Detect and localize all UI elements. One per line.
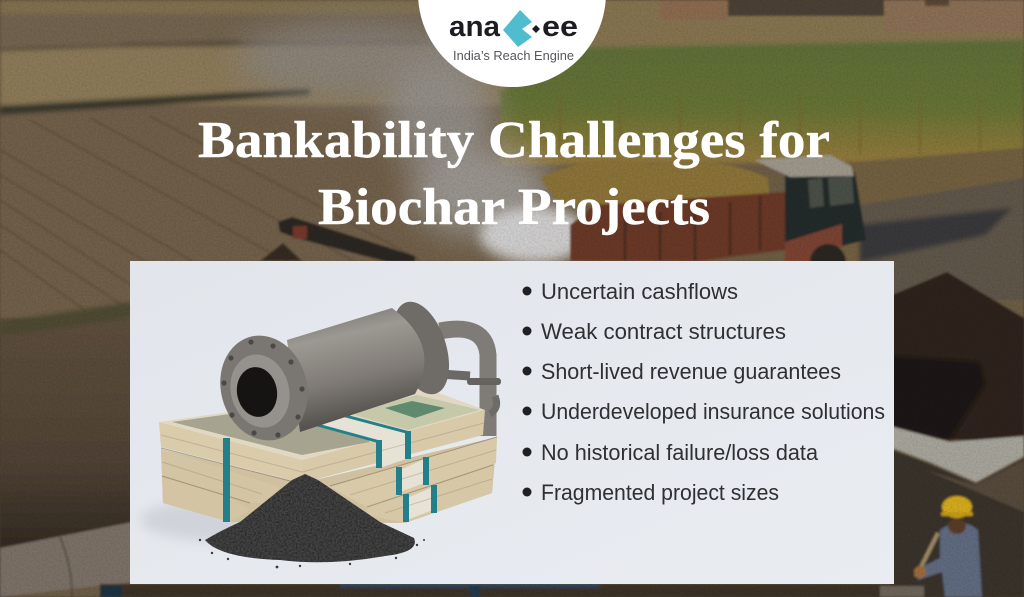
sugarcane field [500,40,1024,165]
bottom-left pipe [0,522,132,597]
logo tagline: India’s Reach Engine [453,49,574,63]
logo badge [418,0,606,87]
ground, lower right [890,449,1024,597]
smoke [235,22,590,263]
right bill [347,395,480,430]
truck [540,155,866,280]
paper band on top [312,414,409,468]
far field and buildings, right [540,0,1024,52]
biochar heap [199,474,425,568]
logo wordmark right: ee [542,11,578,43]
bullet: uncertain cashflows: Uncertain cashflows [541,279,738,304]
logo dot [532,25,540,33]
top layer [159,422,302,483]
wheel [810,244,846,280]
bullet: short-lived revenue guarantees: Short-lived revenue guarantees [541,359,841,384]
bullet: fragmented project sizes: Fragmented project sizes [541,480,779,505]
road, left [0,318,132,558]
layer separators [161,423,497,513]
pipe opening [233,364,281,420]
road, right [830,148,1024,300]
worker [914,496,982,597]
left bill [172,400,370,455]
front flange [209,326,319,450]
panel: challenges card [130,261,894,584]
biochar pile [880,272,1024,440]
flange bolts [221,339,305,438]
illustration: pipe on cash stacks with biochar [140,295,501,568]
title: Bankability Challenges for [198,112,830,169]
truck bed [570,192,785,261]
middle layer [161,449,280,503]
cab [785,172,866,262]
logo diamond mark [503,10,532,47]
title: Biochar Projects [318,179,710,236]
bottom rails [100,584,900,597]
pipe body [287,308,424,432]
far fields, left [0,0,560,325]
title [198,112,830,236]
shadow [140,498,320,542]
bullet: weak contract structures: Weak contract structures [541,319,786,344]
stack base [161,437,497,523]
bottom layer [162,477,250,522]
tarp [890,426,1024,482]
cash stack [159,385,497,523]
bullet: no historical failure/loss data: No historical failure/loss data [541,440,819,465]
logo wordmark left: ana [449,11,501,43]
elbow pipe [440,329,497,436]
rear flange [382,295,460,401]
bullet list [522,279,885,505]
teal straps [223,413,437,522]
field furrows [0,116,420,310]
machine arm [278,217,415,262]
verge strip [0,302,132,336]
hay load [540,160,770,205]
paper bands on lower layers [400,458,427,492]
bullet: underdeveloped insurance solutions: Underdeveloped insurance solutions [541,399,885,424]
